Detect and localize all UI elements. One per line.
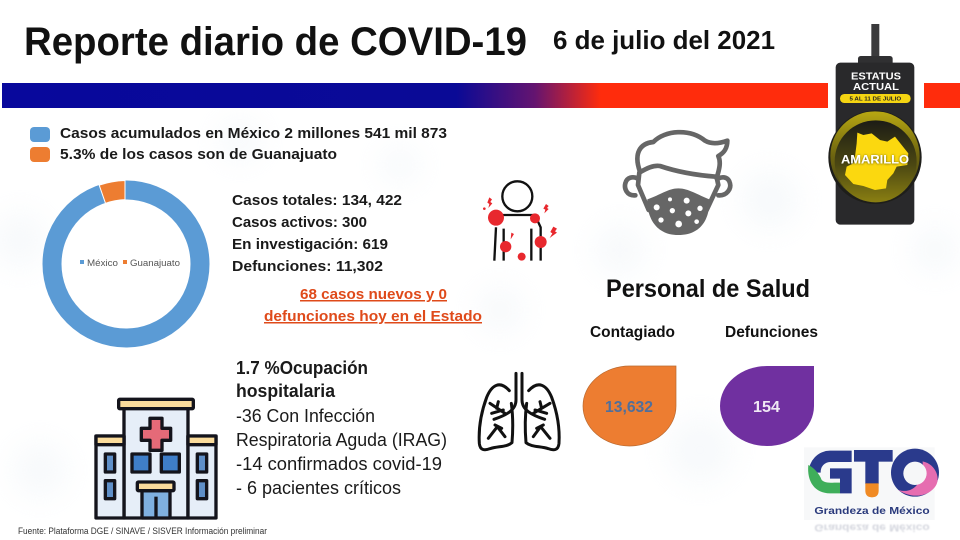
hospital occupancy text: 1.7 %Ocupación <box>236 358 368 378</box>
donut chart <box>52 180 200 338</box>
state case figures: Casos activos: 300 <box>232 214 367 231</box>
label: defunciones: Defunciones <box>725 324 818 341</box>
teardrop: defunciones: 154 <box>753 399 780 416</box>
hospital occupancy text: hospitalaria <box>236 381 336 401</box>
hospital occupancy text: - 6 pacientes críticos <box>236 478 401 498</box>
logo: GTO Grandeza de México <box>804 447 939 533</box>
legend <box>30 125 447 163</box>
donut chart: México <box>87 258 118 268</box>
icon: body with pain points <box>483 181 557 261</box>
new cases callout: defunciones hoy en el Estado <box>264 308 482 325</box>
icon: lungs <box>479 373 559 450</box>
traffic light status: AMARILLO <box>841 153 909 166</box>
state case figures: Defunciones: 11,302 <box>232 258 383 275</box>
icon: face with mask <box>625 132 730 235</box>
label: contagiado: Contagiado <box>590 324 675 341</box>
teardrop: defunciones <box>720 366 814 446</box>
teardrop: contagiado <box>583 366 676 446</box>
new cases callout <box>264 286 482 325</box>
header gradient bar <box>2 83 960 108</box>
new cases callout: 68 casos nuevos y 0 <box>300 286 447 303</box>
state case figures: En investigación: 619 <box>232 236 388 253</box>
icon: hospital <box>96 399 216 518</box>
hospital occupancy text: -36 Con Infección <box>236 406 375 426</box>
heading: personal de salud: Personal de Salud <box>606 275 810 303</box>
hospital occupancy text <box>236 358 447 498</box>
legend: 5.3% de los casos son de Guanajuato <box>60 146 337 163</box>
hospital occupancy text: Respiratoria Aguda (IRAG) <box>236 430 447 450</box>
state case figures <box>232 192 402 275</box>
traffic light status: 5 AL 11 DE JULIO <box>849 96 901 102</box>
legend: Casos acumulados en México 2 millones 541 mil 873 <box>60 125 447 142</box>
traffic light status: ACTUAL <box>853 82 899 93</box>
state case figures: Casos totales: 134, 422 <box>232 192 402 209</box>
donut chart: Guanajuato <box>130 258 180 268</box>
logo: GTO Grandeza de México: Grandeza de México <box>814 522 930 533</box>
teardrop: contagiado: 13,632 <box>605 399 653 416</box>
hospital occupancy text: -14 confirmados covid-19 <box>236 454 442 474</box>
traffic light status <box>828 24 922 225</box>
logo: GTO Grandeza de México: Grandeza de México <box>814 506 930 517</box>
traffic light status: ESTATUS <box>851 71 901 82</box>
title: Reporte diario de COVID-19 <box>24 20 527 64</box>
date: 6 de julio del 2021 <box>553 25 775 55</box>
source note: Fuente: Plataforma DGE / SINAVE / SISVER Información preliminar <box>18 526 267 536</box>
